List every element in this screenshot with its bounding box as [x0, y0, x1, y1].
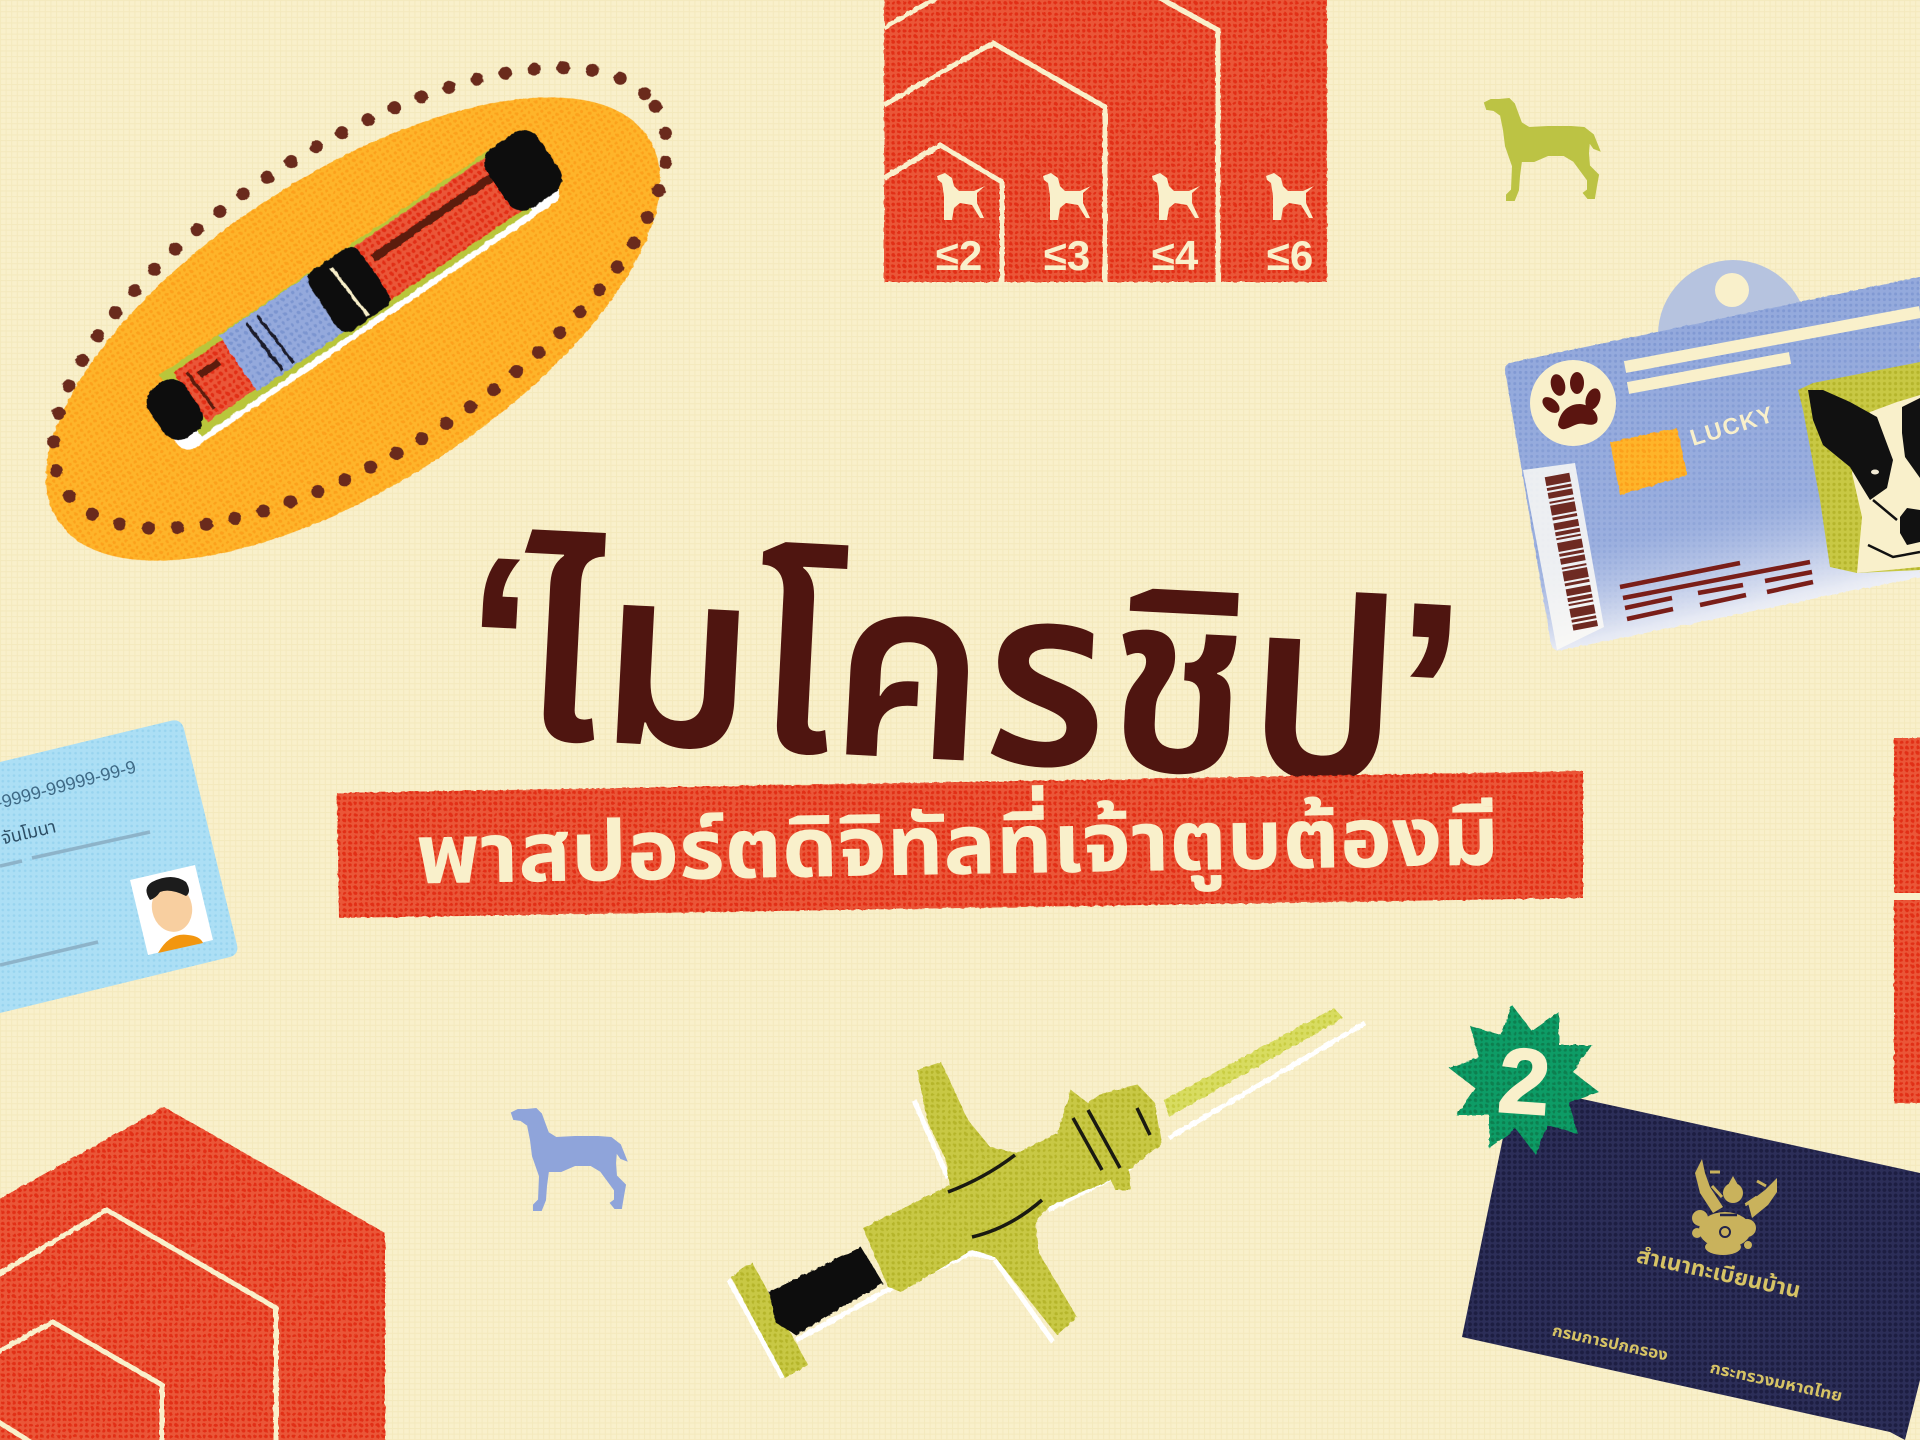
- barrel and wings: [731, 1062, 1162, 1378]
- dog limit labels: ≤3: [1044, 232, 1090, 279]
- orange chip: [1610, 428, 1687, 495]
- address lines: [0, 832, 150, 965]
- dog photo: [1798, 362, 1920, 573]
- panel: bottom-left house: [0, 1107, 385, 1440]
- panel: microchip capsule on orange ellipse: [0, 0, 738, 651]
- panel: microchip injector syringe: [729, 1008, 1365, 1378]
- subtitle text: พาสปอร์ตดิจิทัลที่เจ้าตูบต้องมี: [415, 776, 1500, 905]
- department label: กรมการปกครอง: [1551, 1323, 1669, 1365]
- banner background: [337, 771, 1583, 918]
- book title: สำเนาทะเบียนบ้าน: [1634, 1243, 1803, 1303]
- dog icons: [937, 173, 1314, 220]
- white shadow lines: [729, 1023, 1365, 1378]
- garuda emblem: [1692, 1159, 1777, 1255]
- dog limit labels: [936, 232, 1313, 279]
- cream divider: [1890, 893, 1920, 900]
- red house shape: [0, 1107, 385, 1440]
- card body: [0, 720, 237, 1013]
- barcode: [1557, 475, 1586, 630]
- card body: [1505, 277, 1920, 650]
- dog limit labels: ≤4: [1152, 232, 1199, 279]
- portrait photo: [130, 865, 213, 955]
- card detail lines: [1620, 562, 1813, 619]
- nested house outlines: [884, 0, 1218, 282]
- lanyard tab: [1658, 260, 1808, 410]
- panel: house registration book: [1462, 1084, 1920, 1440]
- house outlines: [0, 1210, 276, 1440]
- red block: [1894, 738, 1920, 1103]
- main title: ‘: [457, 504, 540, 781]
- dog limit labels: ≤6: [1267, 232, 1313, 279]
- panel: citizen ID card: [0, 720, 237, 1013]
- badge: number 2 star: [1449, 1005, 1599, 1155]
- dog limit labels: ≤2: [936, 232, 982, 279]
- panel: right edge red house: [1890, 738, 1920, 1103]
- tab hole: [1715, 273, 1749, 307]
- green star: [1449, 1005, 1599, 1155]
- orange ellipse: [0, 7, 733, 651]
- subtitle banner: [337, 771, 1583, 918]
- name: จันโมนา: [0, 816, 58, 848]
- paw badge: [1530, 360, 1616, 446]
- main title: ไมโครชิป: [512, 511, 1407, 836]
- main title: ’: [1384, 547, 1471, 841]
- needle: [1164, 1008, 1343, 1117]
- halftone overlay: [1505, 277, 1920, 650]
- black detail marks: [948, 1108, 1150, 1237]
- red block: [884, 0, 1327, 282]
- icon: olive dog silhouette: [1485, 99, 1599, 200]
- black plunger: [769, 1247, 883, 1335]
- icon: blue dog silhouette: [512, 1109, 626, 1210]
- navy book cover: [1462, 1084, 1920, 1440]
- panel: pet ID card: [1505, 260, 1920, 650]
- card name: LUCKY: [1687, 401, 1777, 451]
- microchip capsule: [136, 123, 574, 458]
- badge number: 2: [1495, 1029, 1553, 1135]
- name stripes: [1625, 312, 1920, 388]
- dotted brown outline: [0, 0, 738, 617]
- ministry label: กระทรวงมหาดไทย: [1708, 1360, 1844, 1405]
- panel: house size stack with dog limits: [884, 0, 1327, 282]
- barcode strip: [1523, 463, 1604, 650]
